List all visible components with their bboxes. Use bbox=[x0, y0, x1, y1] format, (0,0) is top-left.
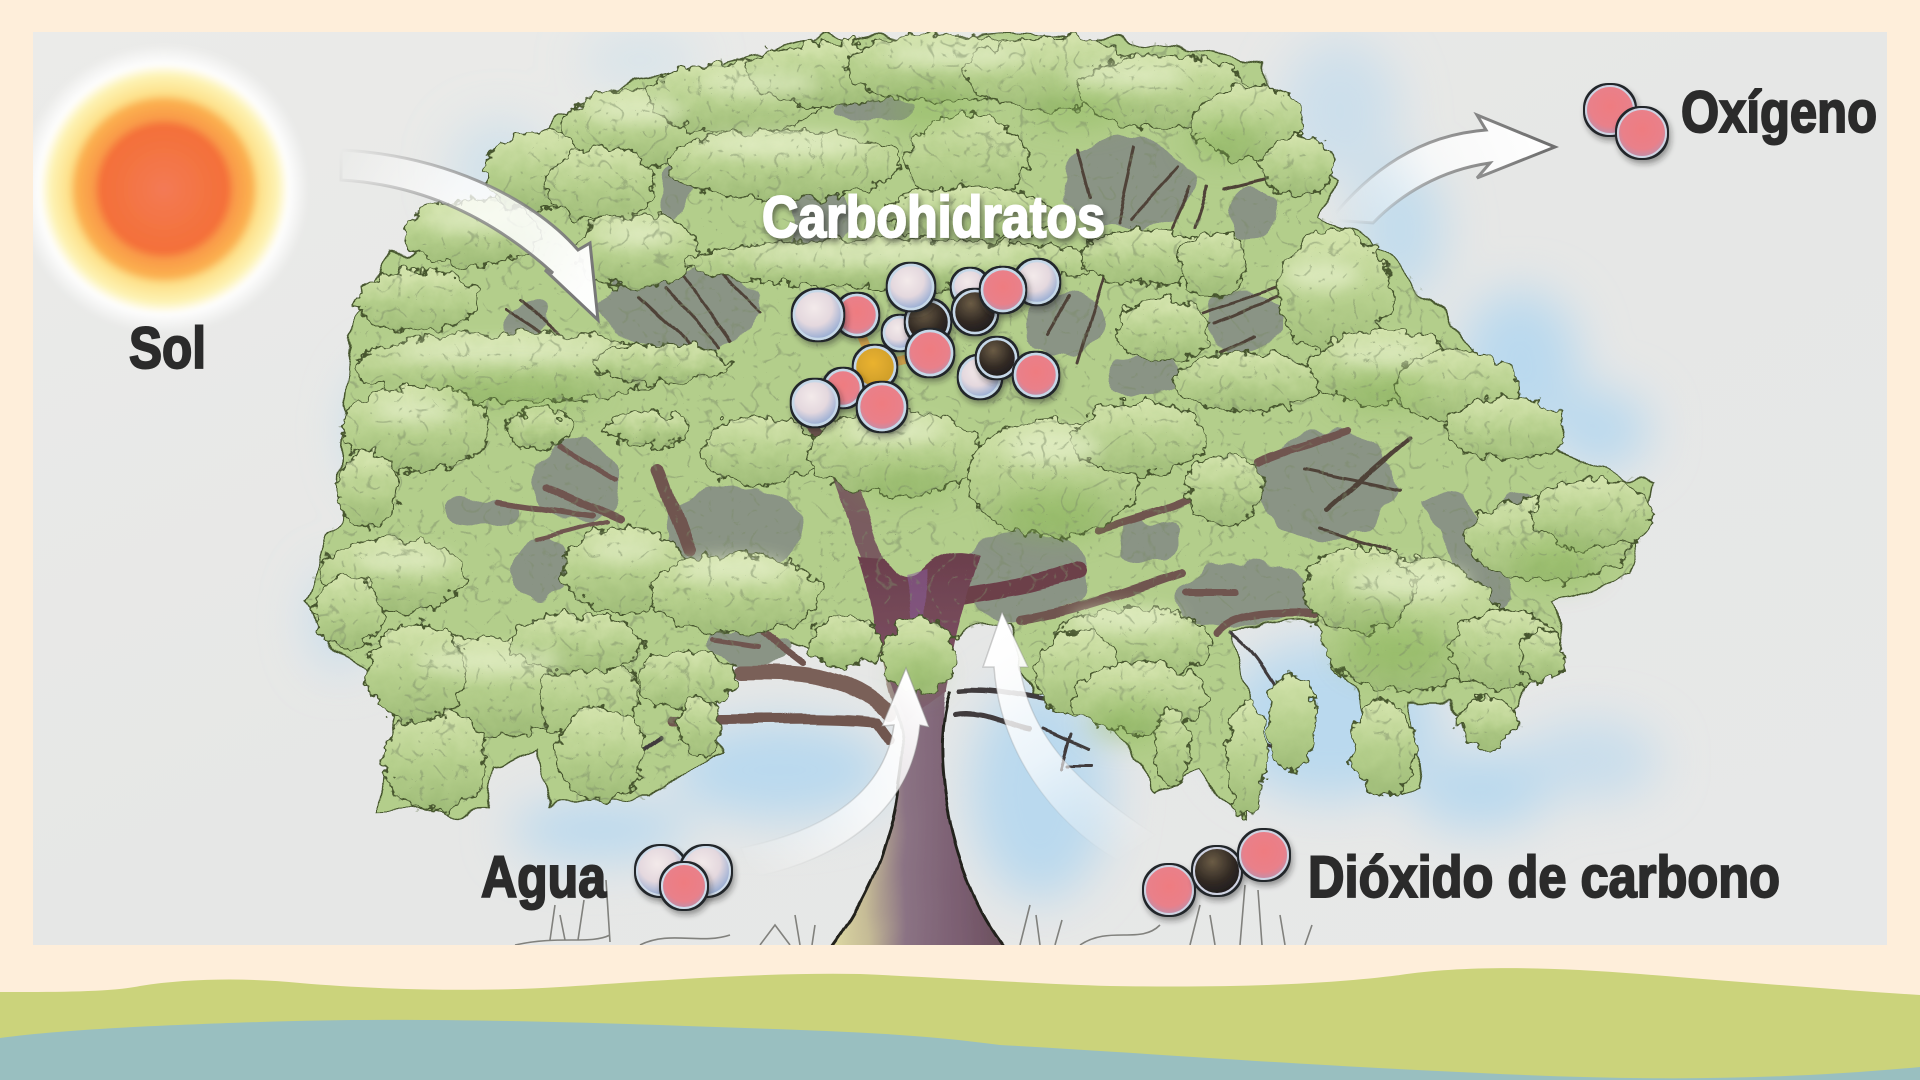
sky wash behind tree bbox=[310, 35, 1660, 900]
ink foliage lines bbox=[303, 33, 1653, 820]
trunk bbox=[832, 552, 1006, 948]
label: Carbohidratos: Carbohidratos bbox=[762, 185, 1105, 250]
green hill bbox=[0, 968, 1920, 1080]
green canopy mass bbox=[303, 33, 1653, 820]
label: Agua: Agua bbox=[481, 845, 607, 910]
arrow: sun to leaves bbox=[341, 150, 598, 320]
bottom landscape band bbox=[0, 968, 1920, 1080]
molecule: carbon dioxide bbox=[1145, 831, 1288, 914]
blue lake bbox=[0, 1020, 1920, 1080]
molecule: carbohydrate cluster bbox=[793, 261, 1058, 430]
tree canopy and branches bbox=[303, 33, 1653, 948]
saturated leaf shading bbox=[429, 93, 1598, 740]
leaf clumps bbox=[315, 33, 1653, 816]
label: Dióxido de carbono: Dióxido de carbono bbox=[1308, 845, 1780, 910]
label: Sol: Sol bbox=[129, 316, 206, 381]
arrow: water uptake bbox=[741, 668, 929, 877]
leaf highlights bbox=[355, 44, 1469, 673]
molecule: water bbox=[637, 847, 730, 908]
molecule: oxygen bbox=[1586, 86, 1666, 157]
branches bbox=[463, 147, 1410, 793]
grass bbox=[515, 880, 1312, 945]
icon: sun bbox=[33, 52, 301, 326]
arrow: carbon dioxide uptake bbox=[983, 612, 1155, 860]
arrow: oxygen release bbox=[1330, 115, 1555, 223]
label: Oxígeno: Oxígeno bbox=[1681, 80, 1877, 145]
shadow gaps between foliage bbox=[441, 97, 1547, 666]
